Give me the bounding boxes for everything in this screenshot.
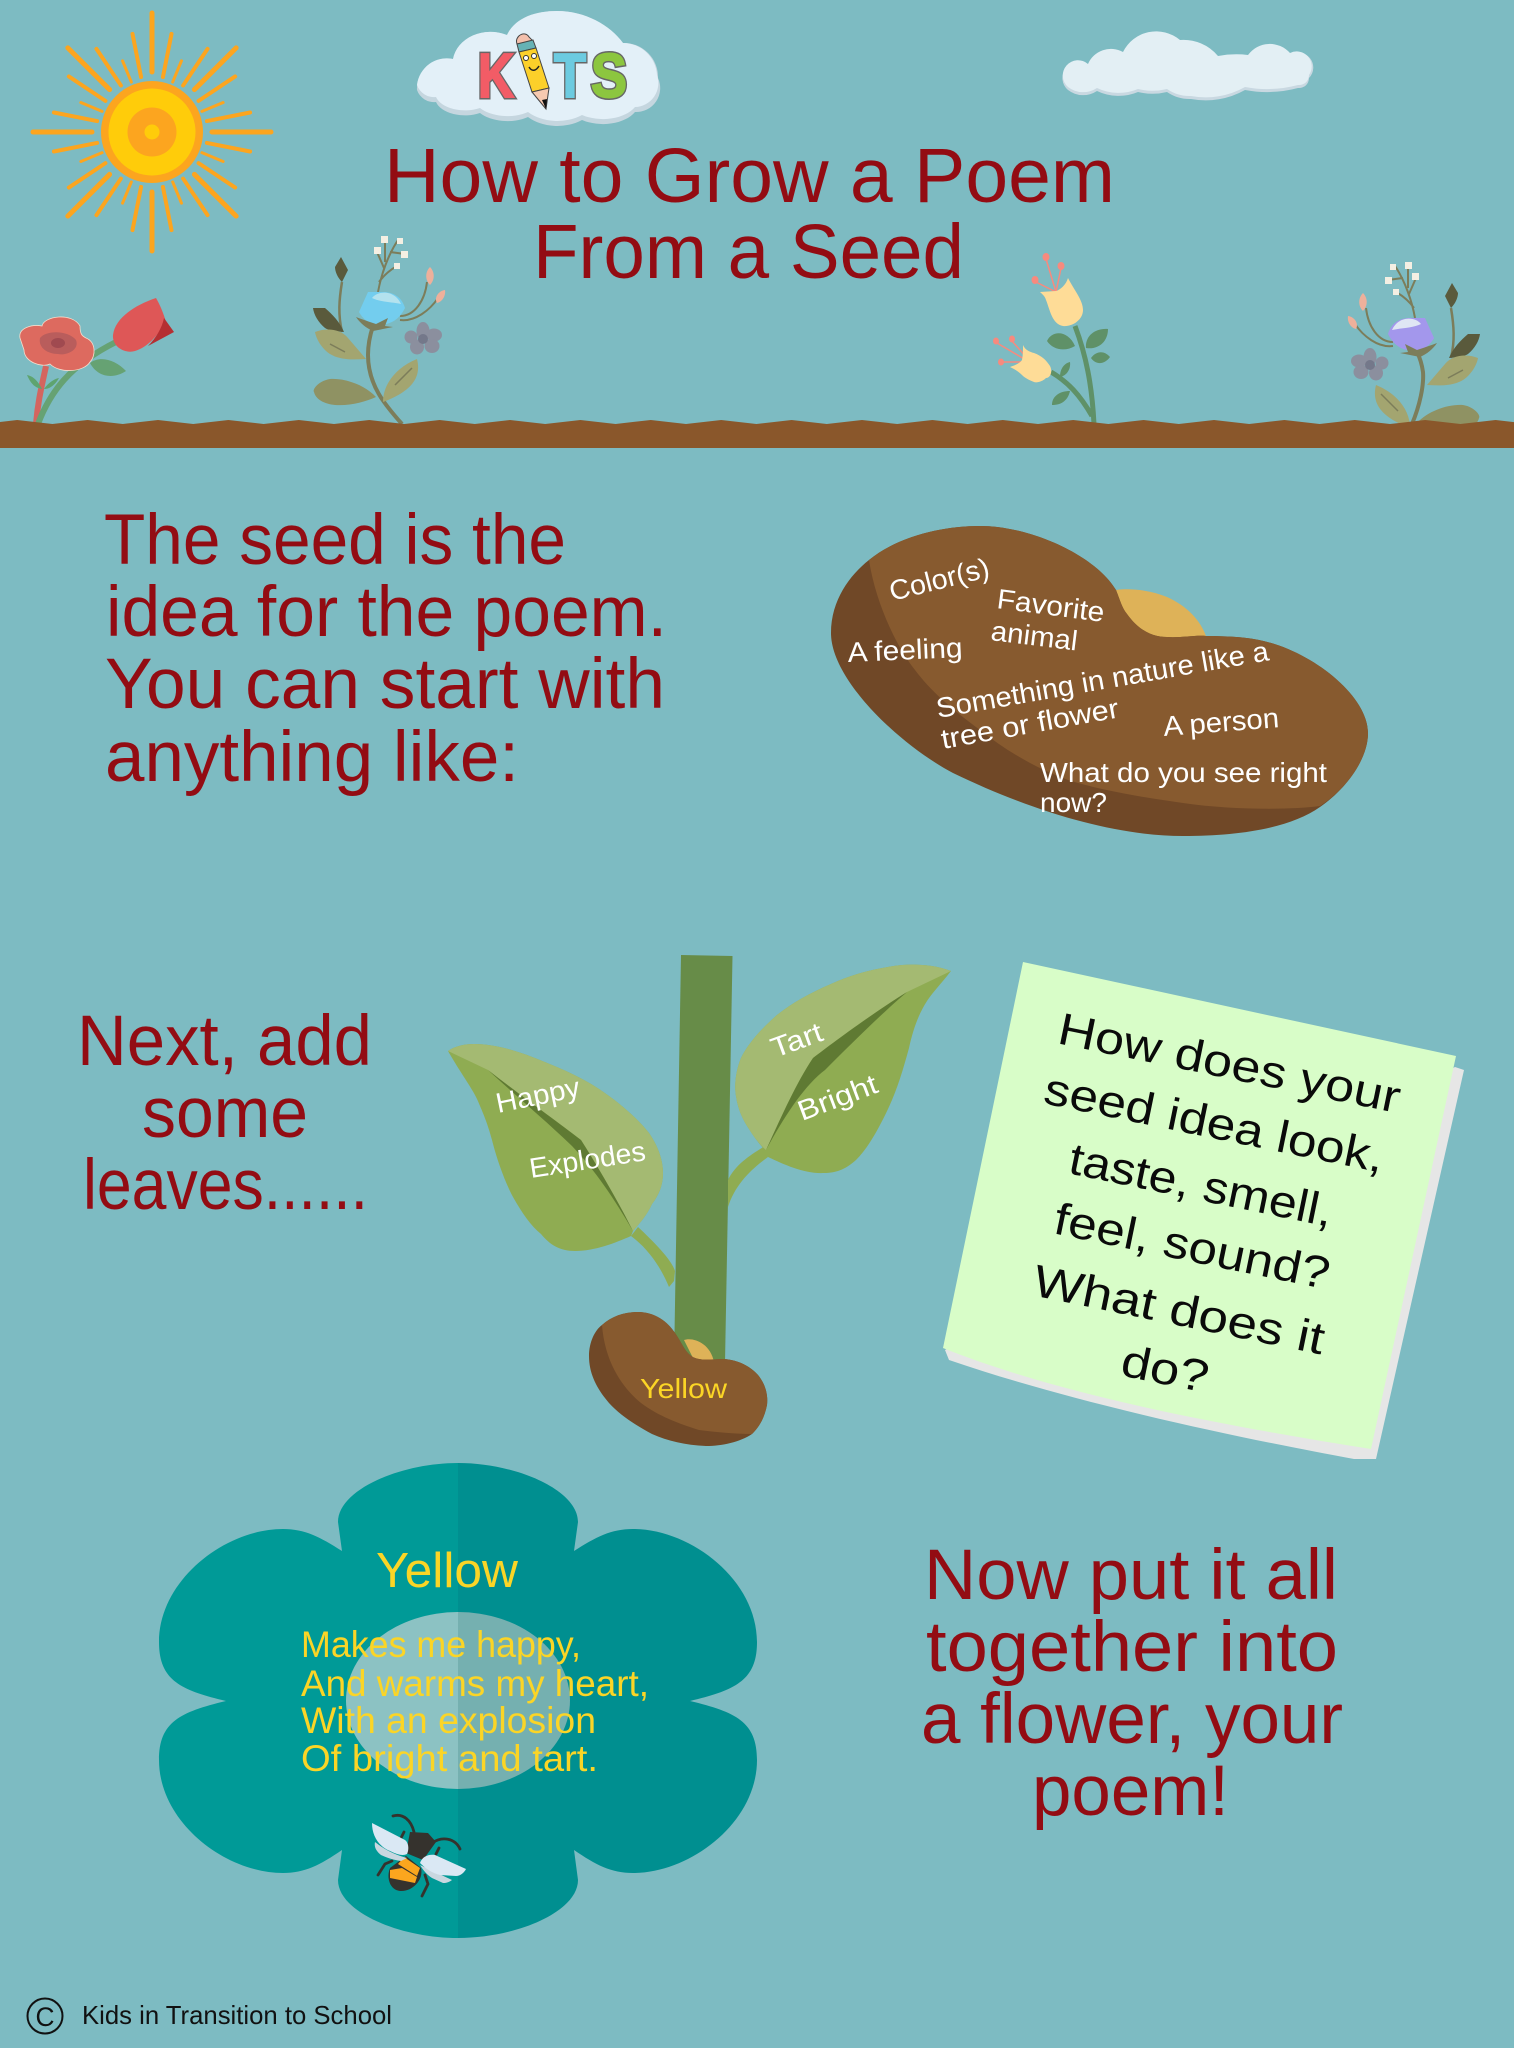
panel: sticky note: [943, 962, 1464, 1459]
text block: put it together: together into: [926, 1608, 1338, 1687]
icon: bee: [372, 1815, 466, 1896]
poem title: Yellow: [376, 1544, 519, 1598]
leaf text: Tart: Tart: [766, 1016, 827, 1064]
icon: sun: [33, 13, 271, 251]
poem text: And warms my heart,: [301, 1663, 649, 1704]
logo: KITS cloud: [417, 11, 660, 126]
text block: put it together: [921, 1536, 1343, 1831]
text block: seed intro: The seed is the: [104, 501, 566, 580]
icon: red flowers: [20, 298, 174, 424]
flower centre: [346, 1612, 570, 1789]
text block: seed intro: idea for the poem.: [106, 573, 667, 652]
sticky text: do?: [1117, 1335, 1213, 1402]
seed text: Favorite animal: animal: [989, 615, 1079, 657]
text block: add leaves: leaves......: [83, 1146, 368, 1225]
seed text: Color(s): Color(s): [886, 552, 992, 607]
sticky text: taste, smell,: [1065, 1133, 1338, 1237]
icon: white cloud: [1062, 31, 1313, 100]
sprout stem: [674, 955, 732, 1363]
poem text: With an explosion: [301, 1700, 596, 1741]
text block: add leaves: Next, add: [77, 1002, 372, 1081]
icon: purple flower plant: [1348, 262, 1480, 431]
text block: seed intro: You can start with: [105, 645, 665, 724]
flower left half: [159, 1463, 458, 1938]
icon: copyright: [28, 1998, 62, 2034]
icon: blue flower plant: [313, 236, 445, 424]
seed text: nature: Something in nature like a: [934, 635, 1271, 724]
seed text: Favorite animal: Favorite: [995, 583, 1106, 628]
sticky text: seed idea look,: [1040, 1063, 1389, 1182]
panel: flower poem: [159, 1463, 757, 1938]
text block: seed intro: [104, 501, 667, 797]
leaf text: Bright: Bright: [793, 1068, 882, 1127]
logo letter K: K: [478, 42, 514, 111]
logo letter S: S: [591, 42, 627, 111]
logo letter T: T: [554, 42, 586, 111]
logo letter K: K: [478, 42, 514, 111]
panel: big seed with ideas: [831, 526, 1368, 836]
sticky text: What does it: [1029, 1255, 1330, 1364]
flower right half: [458, 1463, 757, 1938]
sticky text: [1029, 1003, 1405, 1402]
seed text: what do you see: [1040, 757, 1327, 818]
footer credit: [28, 1998, 392, 2034]
small seed: [589, 1312, 767, 1446]
seed text: nature: [934, 635, 1271, 755]
title: [384, 133, 1115, 295]
logo letter S: S: [591, 42, 627, 111]
text block: add leaves: [77, 1002, 372, 1225]
text block: put it together: a flower, your: [921, 1680, 1343, 1759]
text block: put it together: poem!: [1032, 1752, 1229, 1831]
seed text: Favorite animal: [989, 583, 1106, 657]
soil strip: [0, 420, 1514, 448]
poem text: Of bright and tart.: [301, 1738, 598, 1779]
leaf text: Happy: Happy: [493, 1071, 582, 1119]
seed text: what do you see: now?: [1040, 787, 1107, 818]
sticky text: How does your: [1054, 1003, 1405, 1123]
poem text: [301, 1624, 649, 1779]
right leaf: [728, 965, 951, 1207]
poem text: Makes me happy,: [301, 1624, 581, 1665]
text block: put it together: Now put it all: [924, 1536, 1338, 1615]
logo letter T: T: [554, 42, 586, 111]
icon: yellow flower plant: [993, 253, 1110, 424]
text block: add leaves: some: [142, 1074, 308, 1153]
seed text: nature: tree or flower: [939, 693, 1121, 755]
seed text: what do you see: What do you see right: [1040, 757, 1327, 788]
credit text: Kids in Transition to School: [82, 2000, 392, 2030]
icon: copyright: C: [36, 2002, 54, 2032]
left leaf: [448, 1044, 675, 1287]
icon: pencil: [516, 34, 549, 109]
title: How to Grow a Poem: [384, 133, 1115, 219]
sticky text: feel, sound?: [1050, 1193, 1335, 1299]
seed label: Yellow: Yellow: [640, 1373, 728, 1404]
text block: seed intro: anything like:: [105, 718, 519, 797]
leaf text: Explodes: Explodes: [527, 1135, 648, 1184]
seed text: A person: A person: [1162, 702, 1280, 742]
panel: sprout with leaves: [448, 955, 951, 1446]
seed text: A feeling: A feeling: [847, 632, 963, 668]
title: From a Seed: [533, 209, 964, 295]
